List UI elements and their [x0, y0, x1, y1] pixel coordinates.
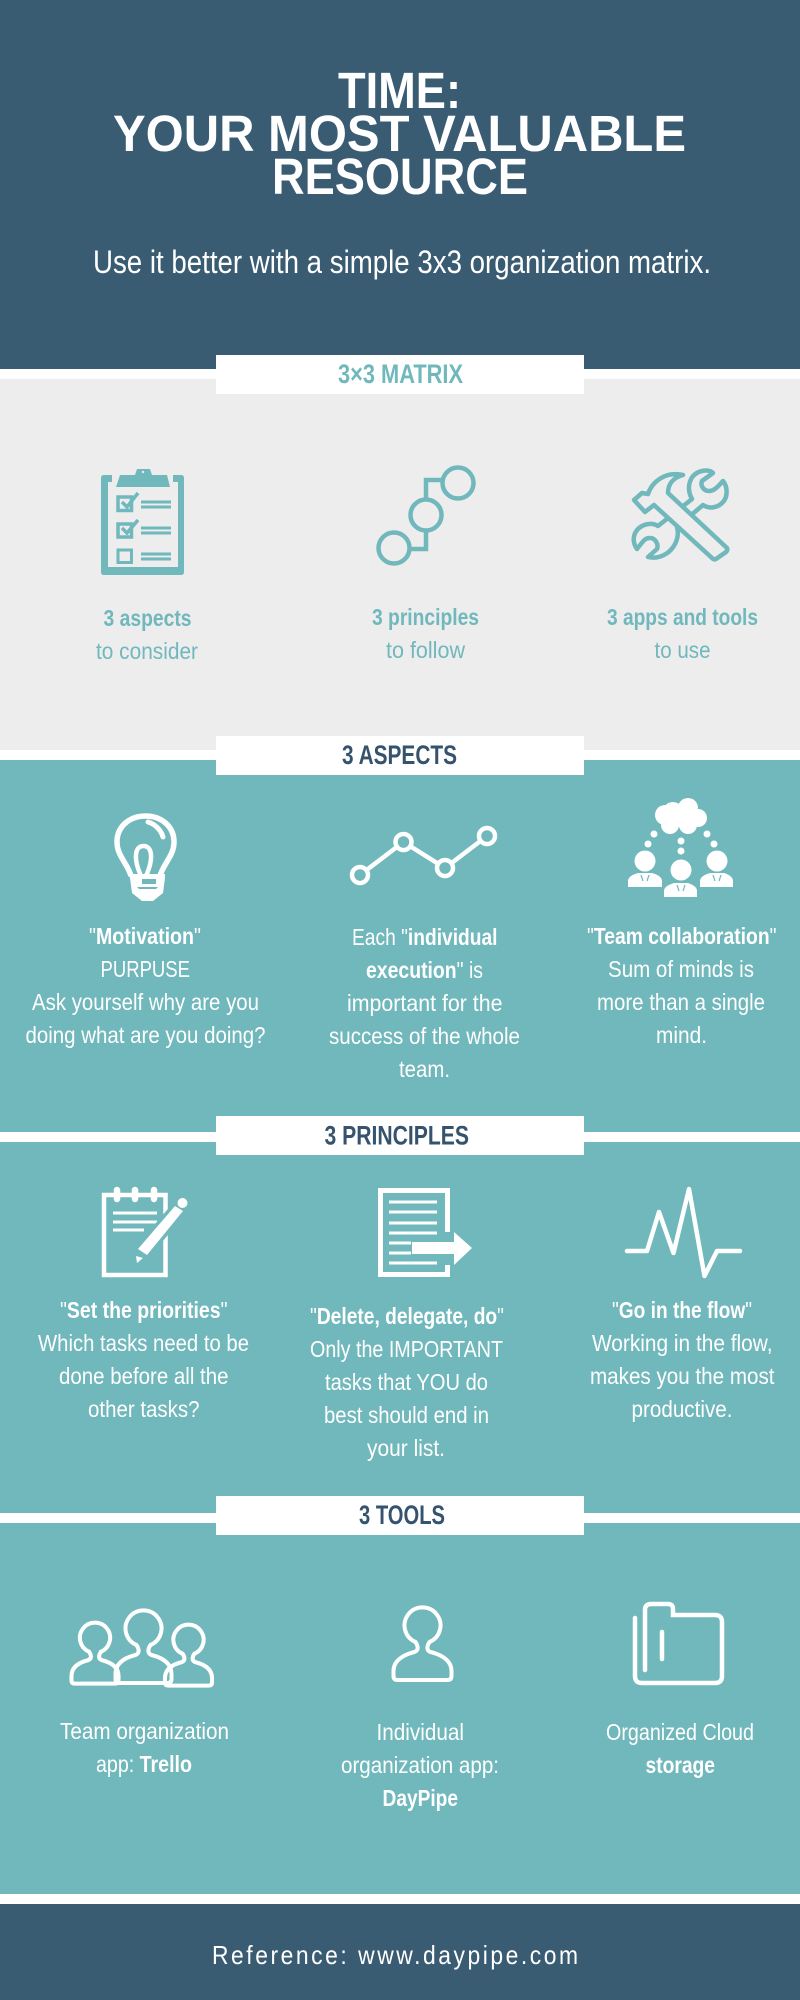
text: delete, delegate, do: tasks that YOU do: [325, 1369, 488, 1395]
text: delete, delegate, do: best should end in: [324, 1402, 489, 1428]
title: TIME:: [338, 62, 461, 119]
text: delete, delegate, do: your list.: [367, 1435, 445, 1461]
icon: light bulb: [117, 816, 174, 901]
text: team collaboration: more than a single: [597, 989, 765, 1015]
text: individual organization app: organization app:: [341, 1752, 499, 1778]
icon: folder: [635, 1604, 722, 1683]
text: 3 apps and tools: 3 apps and tools: [607, 604, 758, 630]
panel: 3 principles: [0, 1116, 800, 1513]
subtitle: Use it better with a simple 3x3 organization matrix.: [93, 244, 711, 280]
text: individual execution: success of the whole: [329, 1023, 520, 1049]
text: 3 principles: [372, 604, 479, 663]
text: motivation: doing what are you doing?: [26, 1022, 266, 1048]
text: delete, delegate, do: "Delete, delegate, do": [310, 1303, 504, 1329]
text: set the priorities: done before all the: [59, 1363, 228, 1389]
panel: 3x3 matrix: [0, 355, 800, 750]
text: team collaboration: mind.: [656, 1022, 707, 1048]
text: set the priorities: "Set the priorities": [60, 1297, 228, 1323]
panel: 3 aspects: [0, 736, 800, 1132]
text: motivation: [26, 923, 266, 1048]
heading tab: 3 aspects: 3 ASPECTS: [342, 740, 457, 770]
icon: linked circles: [378, 468, 474, 564]
text: motivation: Ask yourself why are you: [32, 989, 259, 1015]
text: set the priorities: Which tasks need to be: [38, 1330, 249, 1356]
panel: 3 tools: [0, 1496, 800, 1894]
text: team collaboration: [587, 923, 776, 1048]
text: individual organization app: DayPipe: [382, 1785, 458, 1811]
text: set the priorities: other tasks?: [88, 1396, 200, 1422]
heading tab: 3 principles: 3 PRINCIPLES: [324, 1120, 469, 1150]
heading tab: 3x3 matrix: [216, 355, 584, 394]
text: team organization app: app: Trello: [96, 1751, 192, 1777]
text: motivation: "Motivation": [89, 923, 201, 949]
text: individual execution: [329, 924, 520, 1082]
heading tab: 3 principles: [216, 1116, 584, 1155]
text: go in the flow: productive.: [632, 1396, 732, 1422]
heading tab: 3 tools: 3 TOOLS: [359, 1500, 445, 1530]
icon: team of people: [71, 1610, 212, 1686]
text: delete, delegate, do: [310, 1303, 504, 1461]
footer reference text: Reference: www.daypipe.com: [212, 1942, 578, 1970]
text: individual organization app: [341, 1719, 499, 1811]
text: individual execution: team.: [399, 1056, 450, 1082]
text: organized cloud storage: [606, 1719, 754, 1778]
text: individual execution: execution" is: [366, 957, 483, 983]
text: 3 principles: 3 principles: [372, 604, 479, 630]
text: 3 aspects: 3 aspects: [104, 605, 192, 631]
text: team collaboration: Sum of minds is: [608, 956, 754, 982]
text: organized cloud storage: storage: [646, 1752, 715, 1778]
icon: document with arrow: [380, 1190, 472, 1274]
heading tab: 3 aspects: [216, 736, 584, 775]
heading tab: 3x3 matrix: 3×3 MATRIX: [338, 359, 463, 389]
text: team collaboration: "Team collaboration": [587, 923, 776, 949]
text: go in the flow: makes you the most: [590, 1363, 775, 1389]
text: organized cloud storage: Organized Cloud: [606, 1719, 754, 1745]
text: team organization app: [60, 1718, 229, 1777]
panel: footer: [0, 1904, 800, 2000]
text: 3 aspects: to consider: [96, 638, 198, 664]
text: 3 aspects: [96, 605, 198, 664]
text: team organization app: Team organization: [60, 1718, 229, 1744]
text: 3 principles: to follow: [386, 637, 465, 663]
text: 3 apps and tools: to use: [654, 637, 710, 663]
icon: clipboard checklist: [101, 469, 184, 575]
icon: single person: [394, 1607, 452, 1680]
text: set the priorities: [38, 1297, 249, 1422]
title: [113, 62, 686, 205]
icon: hammer and wrench: [634, 471, 727, 559]
text: go in the flow: "Go in the flow": [612, 1297, 752, 1323]
text: go in the flow: Working in the flow,: [592, 1330, 772, 1356]
heading tab: 3 tools: [216, 1496, 584, 1535]
text: delete, delegate, do: Only the IMPORTANT: [310, 1336, 503, 1362]
text: motivation: PURPUSE: [100, 956, 190, 982]
text: 3 apps and tools: [607, 604, 758, 663]
icon: notepad and pencil: [104, 1190, 188, 1275]
title: RESOURCE: [272, 148, 528, 205]
text: individual execution: important for the: [347, 990, 502, 1016]
icon: line chart: [352, 828, 495, 883]
icon: pulse line: [627, 1189, 740, 1276]
panel: header: [0, 0, 800, 369]
text: individual execution: Each "individual: [352, 924, 498, 950]
text: go in the flow: [590, 1297, 775, 1422]
text: individual organization app: Individual: [376, 1719, 464, 1745]
icon: team sharing ideas: [628, 798, 733, 897]
title: YOUR MOST VALUABLE: [113, 105, 686, 162]
